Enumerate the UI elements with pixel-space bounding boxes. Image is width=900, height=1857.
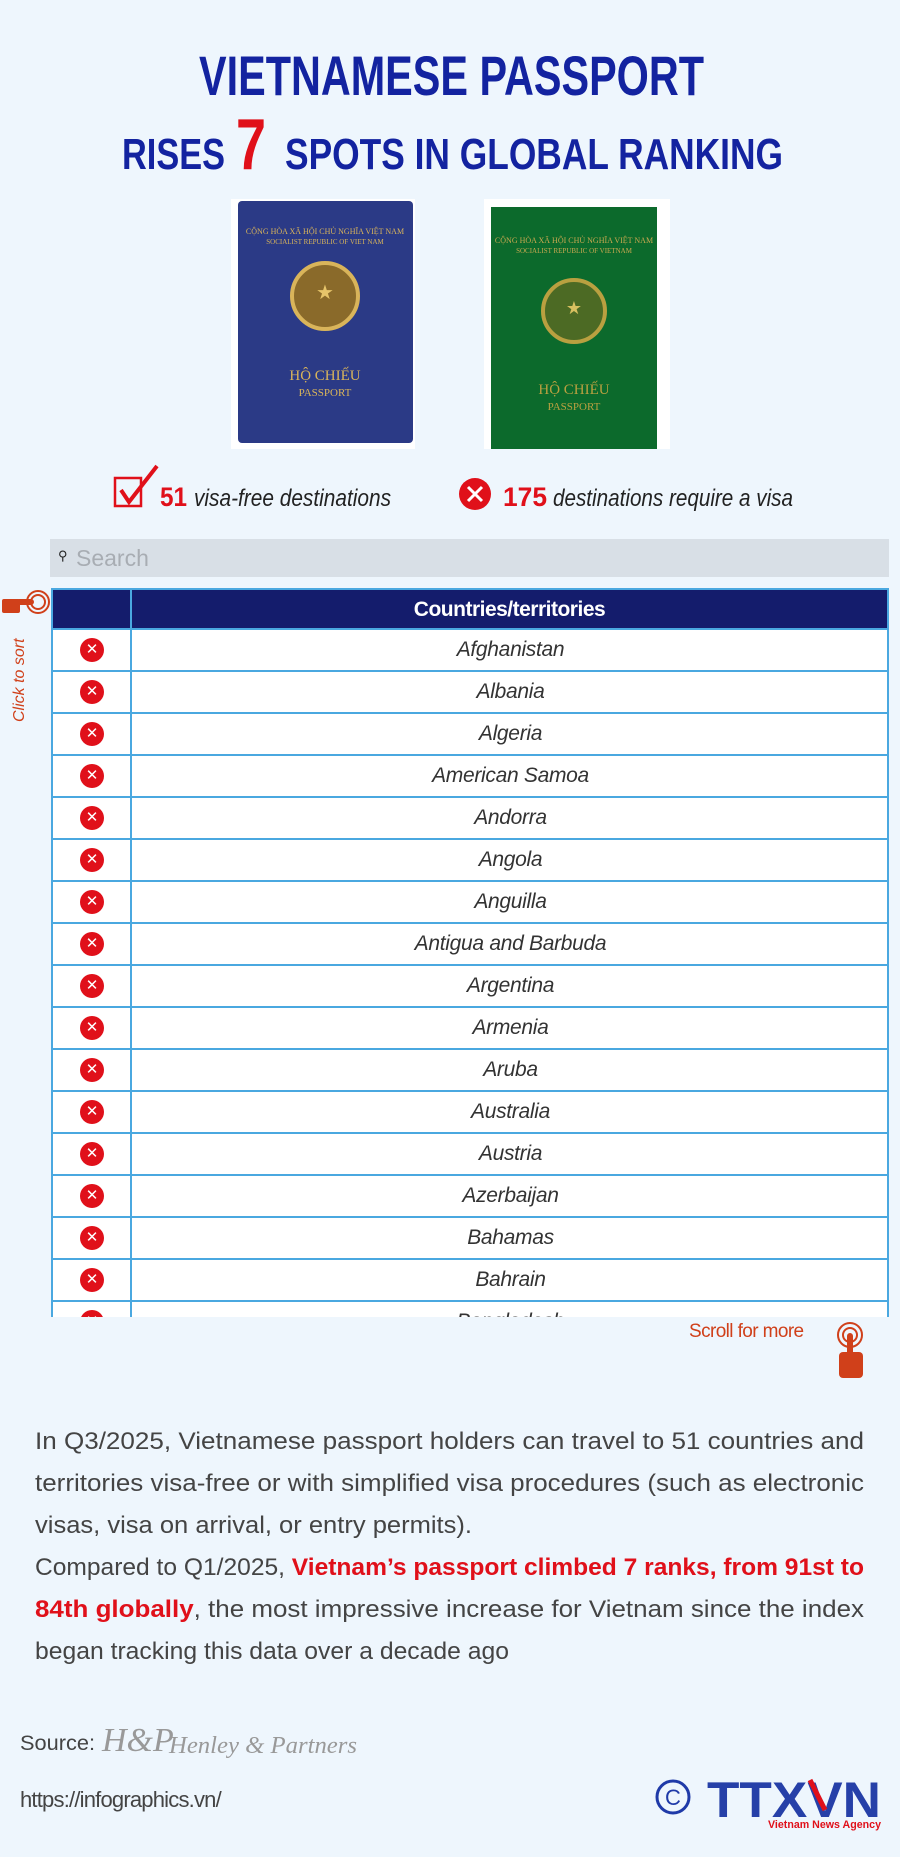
- table header: Countries/territories: [414, 598, 605, 621]
- passport: blue: SOCIALIST REPUBLIC OF VIET NAM: [266, 238, 384, 246]
- search bar: ⚲: [58, 548, 68, 563]
- passport: green: SOCIALIST REPUBLIC OF VIETNAM: [516, 247, 633, 255]
- search bar: Search: [76, 545, 149, 571]
- stats row: 175: [503, 482, 547, 512]
- stats row: visa-free destinations: [194, 485, 391, 512]
- passport: blue: HỘ CHIẾU: [289, 367, 361, 384]
- click to sort hint: [2, 590, 50, 722]
- table: ✕: [86, 1061, 98, 1078]
- table: Aruba: [483, 1058, 538, 1081]
- table: Albania: [477, 680, 544, 703]
- table: Armenia: [472, 1016, 549, 1039]
- table: ✕: [86, 809, 98, 826]
- table: ✕: [86, 683, 98, 700]
- table header: [51, 588, 889, 630]
- table: ✕: [86, 1145, 98, 1162]
- table: ✕: [86, 1229, 98, 1246]
- table: Azerbaijan: [462, 1184, 559, 1207]
- table: Andorra: [474, 806, 547, 829]
- passport: green: HỘ CHIẾU: [538, 381, 610, 398]
- table: ✕: [86, 1103, 98, 1120]
- passport: green: [484, 199, 670, 449]
- table: Angola: [479, 848, 542, 871]
- passport: green: CỘNG HÒA XÃ HỘI CHỦ NGHĨA VIỆT NAM: [495, 235, 653, 245]
- title: SPOTS IN GLOBAL RANKING: [285, 130, 783, 179]
- icon: pointing hand: [2, 590, 50, 614]
- logo: Henley & Partners: Henley & Partners: [168, 1733, 357, 1759]
- table: Austria: [479, 1142, 542, 1165]
- table: Bahamas: [467, 1226, 554, 1249]
- passport: green: ★: [566, 298, 582, 318]
- url: https://infographics.vn/: [20, 1787, 221, 1812]
- table: Bahrain: [475, 1268, 546, 1291]
- table: [51, 588, 889, 1317]
- paragraph: [35, 1428, 864, 1665]
- table: ✕: [86, 1187, 98, 1204]
- table: ✕: [86, 1019, 98, 1036]
- paragraph: visas, visa on arrival, or entry permits).: [35, 1512, 472, 1539]
- passport: blue: CỘNG HÒA XÃ HỘI CHỦ NGHĨA VIỆT NAM: [246, 226, 404, 236]
- table: ✕: [86, 725, 98, 742]
- title: RISES: [122, 130, 225, 179]
- logo: TTXVN: TTXVN: [707, 1772, 881, 1828]
- icon: tapping hand: [837, 1322, 863, 1378]
- table: Australia: [471, 1100, 550, 1123]
- logo: TTXVN: C: [665, 1785, 681, 1810]
- paragraph: 84th globally , the most impressive increase for Vietnam since the index: [35, 1596, 864, 1623]
- scroll for more hint: Scroll for more: [689, 1321, 804, 1342]
- stats row: 51: [160, 482, 187, 512]
- passport: blue: ★: [316, 282, 334, 304]
- table: ✕: [86, 935, 98, 952]
- table: Antigua and Barbuda: [415, 932, 606, 955]
- title: VIETNAMESE PASSPORT: [199, 44, 704, 107]
- logo: TTXVN: Vietnam News Agency: [768, 1819, 882, 1831]
- table: ✕: [86, 851, 98, 868]
- text: click to sort: Click to sort: [11, 638, 28, 722]
- table: Argentina: [467, 974, 554, 997]
- source: [20, 1722, 357, 1759]
- passport images: [231, 199, 670, 449]
- paragraph: territories visa-free or with simplified visa procedures (such as electronic: [35, 1470, 864, 1497]
- logo: Henley & Partners: [101, 1722, 357, 1759]
- passport: green: PASSPORT: [548, 401, 601, 413]
- passport: blue: [231, 199, 415, 449]
- logo: Henley & Partners: H&P: [101, 1722, 174, 1759]
- paragraph: began tracking this data over a decade ago: [35, 1638, 509, 1665]
- search bar: [50, 539, 889, 577]
- table: ✕: [86, 767, 98, 784]
- icon: checkbox: [115, 466, 157, 506]
- stats row: destinations require a visa: [553, 485, 793, 512]
- paragraph: In Q3/2025, Vietnamese passport holders can travel to 51 countries and: [35, 1428, 864, 1455]
- table: ✕: [86, 893, 98, 910]
- table: Anguilla: [474, 890, 547, 913]
- table: ✕: [86, 977, 98, 994]
- stats row: [114, 464, 793, 512]
- table: ✕: [86, 1271, 98, 1288]
- title: [122, 44, 783, 180]
- table: Algeria: [479, 722, 542, 745]
- passport: blue: PASSPORT: [299, 387, 352, 399]
- table: American Samoa: [432, 764, 589, 787]
- table: Afghanistan: [457, 638, 564, 661]
- scroll for more hint: [689, 1321, 863, 1378]
- logo: TTXVN: [656, 1772, 882, 1831]
- source: Source:: [20, 1732, 95, 1755]
- paragraph: Compared to Q1/2025, Vietnam’s passport climbed 7 ranks, from 91st to: [35, 1554, 864, 1581]
- table: ✕: [86, 641, 98, 658]
- icon: red x: [459, 478, 491, 510]
